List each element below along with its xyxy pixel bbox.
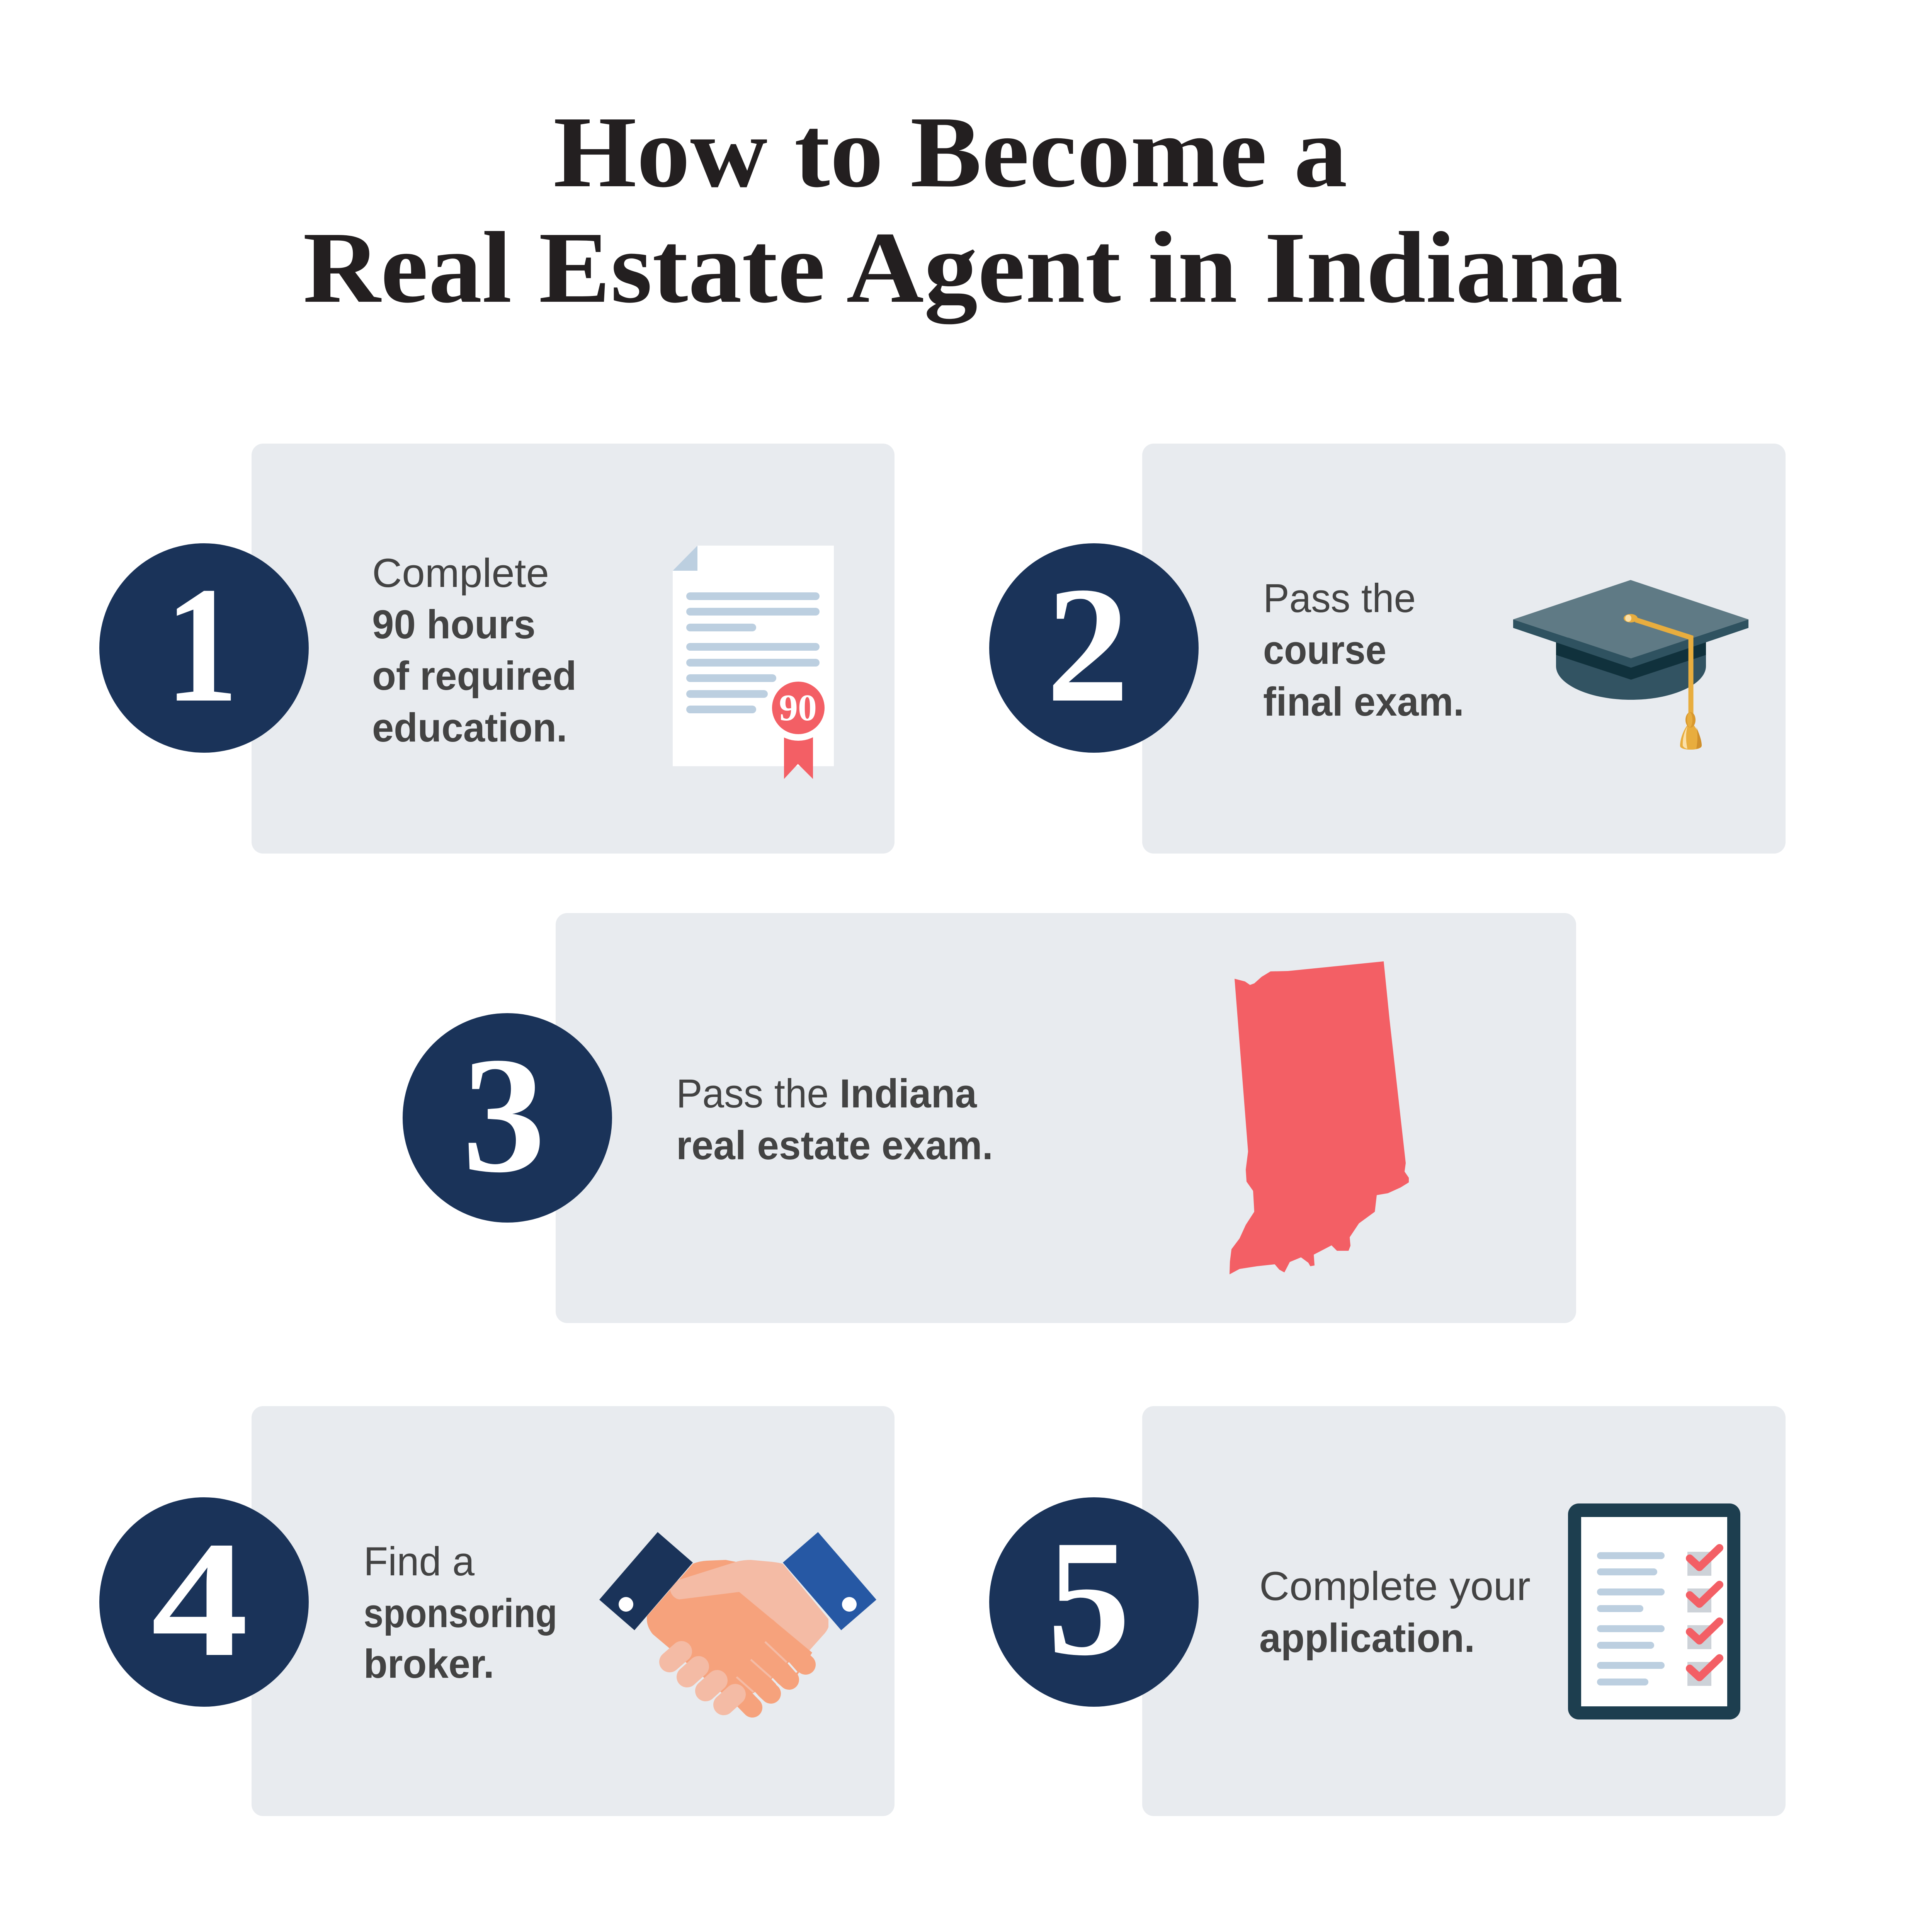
- number badge 5: [989, 1497, 1199, 1707]
- title: How to Become a: [553, 96, 1347, 209]
- panel: step 3: [403, 913, 1576, 1323]
- text: step 1: 90 hours: [372, 602, 536, 647]
- number badge 3: [403, 1013, 612, 1223]
- number badge 2: [989, 543, 1199, 753]
- number badge 5: 5: [1047, 1506, 1131, 1690]
- icon: handshake: [599, 1532, 876, 1708]
- icon: Indiana map: [1230, 961, 1409, 1274]
- icon: checklist: [1568, 1503, 1740, 1719]
- text: step 3: [676, 1071, 993, 1168]
- number badge 3: 3: [462, 1023, 546, 1207]
- text: step 3: real estate exam.: [676, 1123, 993, 1168]
- text: step 4: broker.: [364, 1641, 494, 1687]
- icon: graduation cap: [1513, 580, 1748, 750]
- text: step 2: final exam.: [1263, 679, 1464, 724]
- panel: step 5: [989, 1406, 1786, 1816]
- title: Real Estate Agent in Indiana: [303, 211, 1623, 326]
- text: step 2: Pass the: [1263, 576, 1416, 621]
- icon: certificate document: 90: [779, 687, 817, 729]
- text: step 2: [1263, 576, 1464, 724]
- text: step 1: of required: [372, 653, 577, 699]
- text: step 1: Complete: [372, 551, 549, 596]
- number badge 2: 2: [1046, 553, 1129, 737]
- number badge 1: 1: [165, 553, 238, 737]
- number badge 1: [99, 543, 309, 753]
- panel: step 2: [989, 444, 1786, 854]
- text: step 4: sponsoring: [364, 1591, 557, 1636]
- panel: step 4: [99, 1406, 895, 1816]
- text: step 4: [364, 1539, 557, 1687]
- text: step 5: Complete your: [1259, 1564, 1531, 1609]
- panel: step 1: [99, 444, 895, 854]
- title: [303, 96, 1623, 326]
- number badge 4: [99, 1497, 309, 1707]
- text: step 1: education.: [372, 705, 567, 750]
- text: step 5: application.: [1259, 1616, 1475, 1661]
- text: step 5: [1259, 1564, 1531, 1661]
- number badge 4: 4: [151, 1507, 248, 1691]
- text: step 4: Find a: [364, 1539, 475, 1584]
- text: step 1: [372, 551, 577, 750]
- text: step 2: course: [1263, 628, 1386, 673]
- text: step 3: Pass the Indiana: [676, 1071, 978, 1116]
- icon: certificate document: [673, 546, 834, 779]
